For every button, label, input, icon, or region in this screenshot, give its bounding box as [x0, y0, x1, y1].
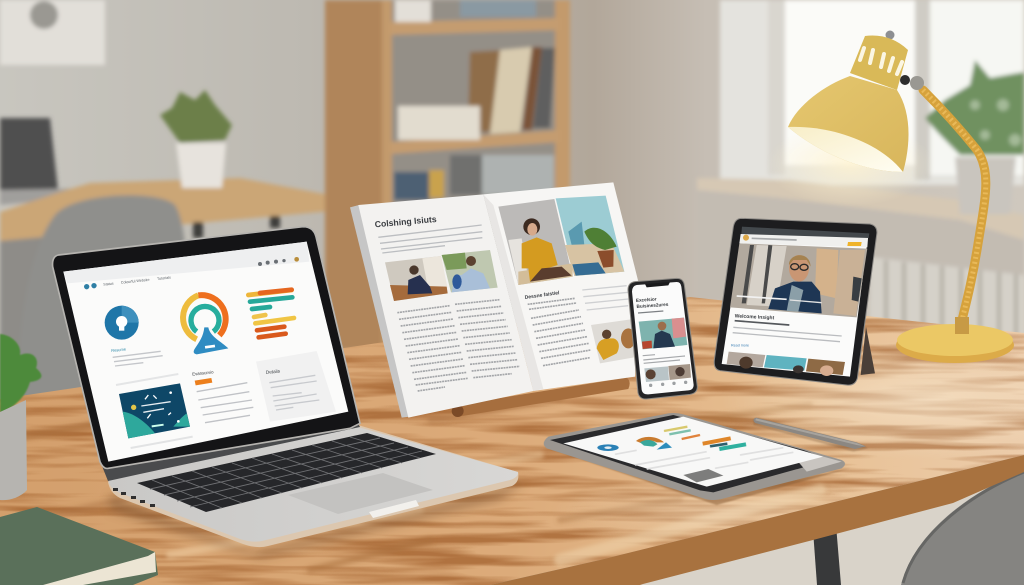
details panel: Details: [266, 368, 281, 375]
front lip: [108, 425, 518, 547]
desk front edge: [490, 455, 1024, 585]
laptop lid and screen: [53, 227, 360, 468]
keyboard: [137, 433, 436, 512]
shadow: [543, 447, 850, 505]
phone photo: [639, 318, 687, 349]
front notch: [369, 500, 419, 518]
body: [628, 278, 697, 399]
blue ring icon: [597, 444, 619, 451]
stand: [861, 327, 875, 375]
window sill: [697, 178, 1024, 240]
wooden stand: [452, 378, 630, 417]
text block left: [111, 346, 178, 385]
table leg: [813, 525, 841, 585]
foreground plant: [0, 334, 41, 500]
url and button: [743, 235, 862, 246]
subheading right page: Dessne faistiel: [524, 290, 560, 301]
spine shadow: [483, 194, 543, 391]
lamp shade: [788, 76, 909, 172]
shade opening: [788, 127, 903, 172]
pot: [0, 400, 27, 500]
browser bar: [63, 242, 309, 283]
rainbow icon: [636, 437, 672, 450]
headline: [636, 297, 669, 309]
screen: [722, 233, 868, 377]
article text: Read more: [731, 344, 749, 348]
right page: [483, 182, 638, 391]
background table: [0, 178, 343, 241]
green notebook: [0, 507, 158, 585]
presenter: [768, 255, 822, 313]
ports: [113, 488, 155, 507]
photo: bottom right: [591, 319, 638, 363]
light glow: [765, 123, 935, 207]
icon: blue circle: [105, 306, 139, 340]
hinge: [102, 412, 360, 481]
table legs: [193, 222, 203, 238]
thumbnail: [683, 469, 723, 482]
left page columns: [397, 300, 520, 391]
lamp arm: [923, 90, 986, 320]
bars: [664, 427, 746, 449]
background laptop: [0, 118, 120, 205]
lid bezel: [53, 227, 360, 468]
desk wood grain: [0, 290, 1024, 585]
screen: [63, 242, 348, 462]
intro text lines: [378, 225, 482, 253]
toolbar dots: [258, 257, 299, 266]
trackpad: [288, 473, 433, 514]
laptop base: [102, 412, 518, 547]
lamp base: [896, 317, 1014, 363]
details panel: [256, 351, 336, 422]
top bar: [739, 234, 868, 247]
background plant: [160, 90, 232, 188]
background room: [0, 0, 1024, 405]
flat tablet and stylus: [543, 413, 868, 505]
shade vents: [860, 48, 902, 74]
photo: woman in yellow: [498, 199, 573, 285]
photo: man in navy: [385, 256, 448, 301]
tablet body: [714, 218, 877, 385]
deck: [108, 427, 518, 542]
right page text lines: [528, 298, 591, 366]
dark promo card: [119, 383, 190, 438]
chair bottom right: [901, 470, 1024, 585]
screen: [632, 282, 694, 394]
window: [720, 0, 1024, 185]
navigation text: Tutorials: [157, 276, 171, 281]
stylus: [753, 418, 868, 452]
silver corner: [797, 457, 842, 472]
desk lamp: [765, 30, 1014, 363]
phone lines: [643, 355, 685, 363]
lower left wall: [0, 230, 60, 405]
horizontal bars: [248, 290, 294, 337]
navigation text: Status: [103, 282, 114, 287]
video still: [730, 243, 867, 317]
headline: Excelsior: [636, 297, 657, 303]
photo: man on sofa: [442, 250, 498, 292]
phone tab icons: [649, 381, 687, 387]
screen: [563, 417, 823, 487]
photo: teal room with plant: [556, 196, 624, 276]
lower wall: [697, 190, 1024, 300]
floor under desk: [600, 460, 1024, 585]
framed picture: [0, 0, 105, 65]
bookshelf: [325, 0, 570, 350]
shade nub: [886, 30, 894, 40]
ring chart icon: [183, 295, 228, 354]
navigation text: Colourful Website: [121, 278, 150, 285]
navigation text: [103, 276, 171, 287]
desk top: [0, 297, 1024, 585]
page block edge: [350, 205, 410, 418]
thumbnails: [727, 352, 845, 376]
open book on stand: [350, 182, 638, 418]
phone: [628, 278, 697, 399]
tablet on stand: [714, 218, 877, 385]
caption line: [131, 437, 193, 448]
tablet body: [544, 413, 845, 500]
lamp collar: [850, 36, 908, 90]
book title: Colshing Isiuts: [374, 214, 437, 229]
left page: [358, 194, 533, 418]
radiator: [870, 257, 1024, 338]
laptop shadow: [110, 482, 525, 558]
headline: Buisines2ures: [636, 302, 669, 309]
phone thumbs: [644, 364, 691, 382]
middle article: Evansurvio: [192, 369, 214, 377]
nav dots: [84, 283, 97, 289]
article text: Welcome Insight: [735, 313, 775, 321]
joint: [900, 75, 924, 90]
article text: [731, 313, 842, 348]
window plant: [925, 60, 1024, 214]
background chair: [15, 195, 187, 400]
notch: [645, 282, 670, 287]
screen text lines: [615, 448, 793, 469]
text block left: Resume: [111, 346, 127, 353]
middle article: [192, 369, 253, 423]
